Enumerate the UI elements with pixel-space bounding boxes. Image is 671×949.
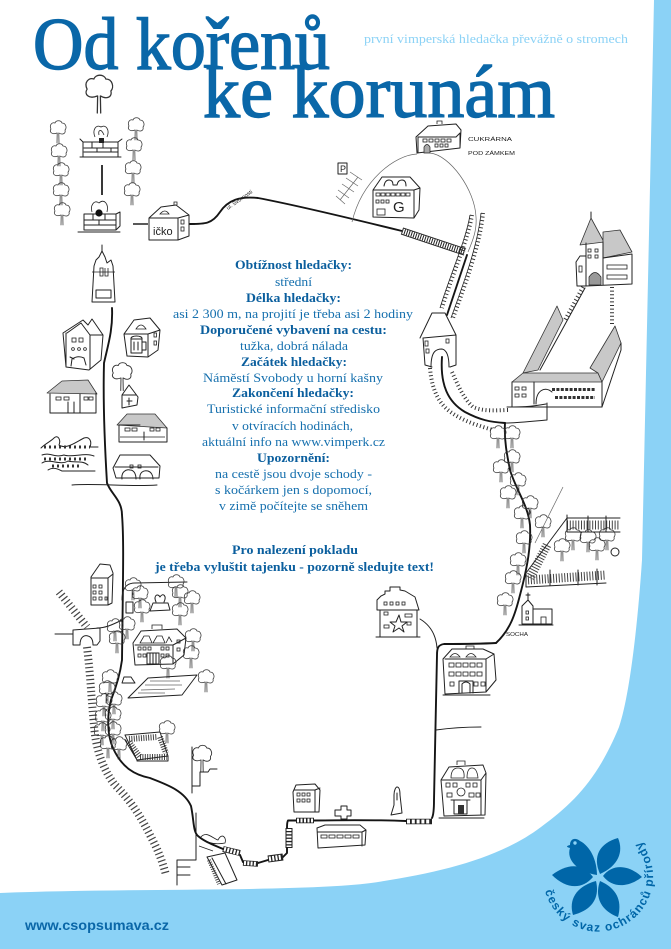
icon: building G — [373, 177, 420, 218]
text block: practical information: Turistické informační středisko — [207, 402, 380, 416]
label: café: CUKRÁRNA — [468, 136, 512, 143]
icon: garden bushes — [41, 437, 98, 471]
text block: practical information: v otvíracích hodinách, — [232, 419, 353, 433]
text block: practical information: aktuální info na www.vimperk.cz — [202, 435, 385, 449]
cross street — [72, 484, 157, 486]
text block: practical information: střední — [275, 275, 313, 289]
icon: chapel with tree — [112, 363, 138, 408]
icon: building G: G — [393, 199, 405, 216]
subtitle: první vimperská hledačka převážně o stromech — [364, 31, 629, 46]
text block: practical information: Doporučené vybavení na cestu: — [200, 323, 387, 337]
text block: practical information — [173, 258, 414, 513]
thin street lines near the park — [97, 582, 187, 628]
thin path around to the café — [352, 153, 476, 252]
street label: ul. Svornosti — [226, 189, 254, 212]
icon: fenced yard — [125, 721, 175, 761]
text block: practical information: Začátek hledačky: — [241, 355, 347, 369]
icon: farmhouse — [47, 380, 97, 413]
callout: treasure hint: je třeba vyluštit tajenku - pozorně sledujte text! — [154, 560, 434, 574]
icon: statue — [391, 787, 402, 815]
trees along west road — [94, 670, 127, 759]
icon: building with star — [376, 587, 437, 648]
icon: gate tower — [420, 313, 456, 367]
label: café — [468, 136, 516, 157]
title: ke korunám — [203, 52, 555, 134]
callout: treasure hint: Pro nalezení pokladu — [232, 543, 358, 557]
lower stairs and road — [223, 820, 432, 864]
website URL: www.csopsumava.cz — [24, 917, 169, 933]
icon: medical cross — [335, 806, 351, 819]
text block: practical information: Upozornění: — [257, 451, 330, 465]
walled road to gate — [440, 213, 483, 318]
icon: café building — [416, 121, 461, 153]
icon: house with dog — [63, 319, 103, 370]
text block: practical information: tužka, dobrá nálada — [240, 339, 348, 353]
icon: bus and parking — [177, 813, 237, 885]
text block: practical information: asi 2 300 m, na projití je třeba asi 2 hodiny — [173, 307, 414, 321]
title — [33, 4, 555, 134]
callout: treasure hint — [154, 543, 434, 574]
stairs — [402, 231, 465, 252]
icon: small tree by the bridge — [192, 745, 217, 793]
icon: health centre — [317, 825, 366, 848]
icon: building Íčko: ičko — [153, 226, 173, 238]
text block: practical information: s kočárkem jen s dopomocí, — [215, 483, 372, 497]
icon: cemetery fence — [526, 515, 620, 587]
side street — [436, 727, 481, 730]
text block: practical information: Délka hledačky: — [246, 291, 341, 305]
icon: school building — [443, 646, 496, 695]
icon: house at the west — [91, 564, 113, 605]
icon: stump and park plaza — [122, 675, 197, 698]
icon: clinic building — [293, 784, 320, 812]
icon: château courtyard — [512, 306, 621, 407]
river-bank grass path — [59, 592, 166, 875]
road below gate — [430, 357, 547, 430]
icon: arcade house — [113, 455, 160, 479]
icon: parking: P — [340, 164, 346, 174]
icon: fountain square with trees — [50, 75, 144, 232]
text block: practical information: Obtížnost hledačky: — [235, 258, 352, 272]
icon: chapel — [519, 593, 553, 625]
logo: Český svaz ochránců přírody: český svaz ochránců přírody — [546, 842, 655, 932]
title: Od kořenů — [33, 4, 330, 86]
main route: upper road — [190, 198, 402, 231]
text block: practical information: na cestě jsou dvoje schody - — [215, 467, 372, 481]
icon: castle — [540, 212, 632, 370]
label: statue: SOCHA — [506, 632, 528, 638]
label: café: POD ZÁMKEM — [468, 150, 516, 157]
main route: west road — [104, 308, 223, 849]
text block: practical information: Náměstí Svobody u horní kašny — [203, 371, 384, 385]
icon: town hall tower — [92, 245, 115, 302]
park trees and fountain — [107, 575, 214, 692]
icon: pub with beer mug — [124, 318, 160, 357]
icon: long house — [117, 414, 167, 442]
text block: practical information: Zakončení hledačky: — [232, 386, 354, 400]
text block: practical information: v zimě počítejte se sněhem — [219, 499, 368, 513]
icon: grand building — [133, 625, 186, 665]
road to the south with trees — [490, 423, 563, 643]
icon: castle gate in the west — [55, 628, 100, 645]
icon: building Íčko — [133, 202, 195, 240]
icon: parking — [336, 163, 362, 204]
main route: east road — [432, 643, 496, 818]
icon: information centre — [439, 761, 486, 818]
